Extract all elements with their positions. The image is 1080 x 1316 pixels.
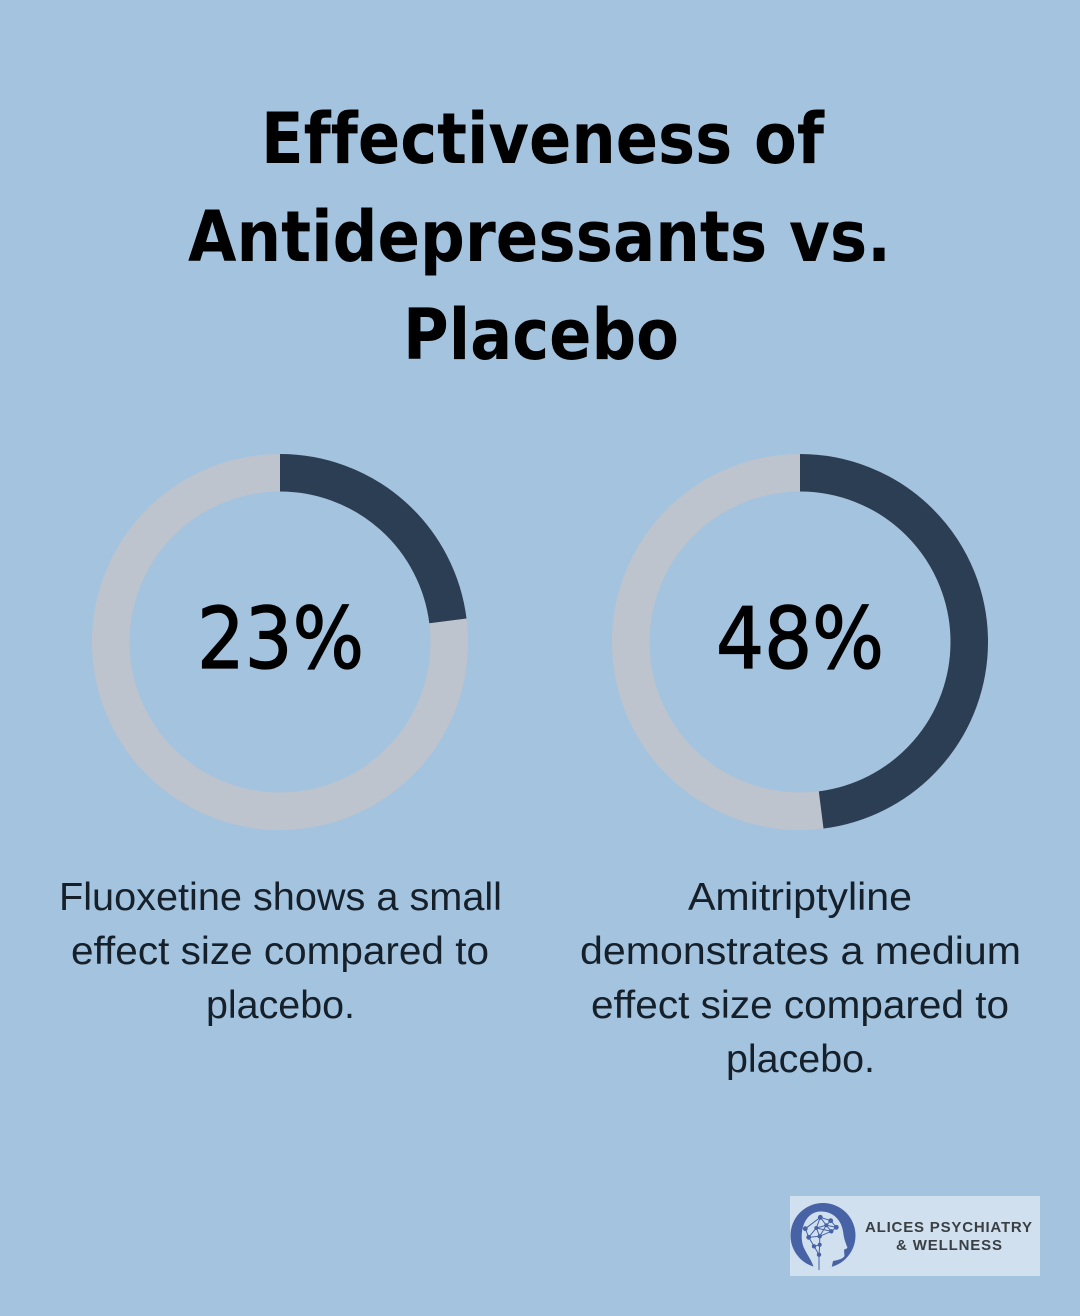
logo text: ALICES PSYCHIATRY [865,1219,1032,1236]
description: amitriptyline [580,876,1021,1081]
title: Placebo [403,294,679,376]
title: Antidepressants vs. [188,196,891,278]
logo text: & WELLNESS [896,1237,1002,1254]
panel: amitriptyline [580,473,1021,1081]
panel: fluoxetine [59,473,502,1027]
description: amitriptyline: effect size compared to [591,984,1009,1027]
description: fluoxetine: Fluoxetine shows a small [59,876,502,919]
description: amitriptyline: demonstrates a medium [580,930,1021,973]
description: fluoxetine [59,876,502,1027]
icon: head with brain network [790,1203,856,1270]
donut chart: 23% [111,473,449,811]
title: Effectiveness of [261,98,825,180]
stat: 23%: 23% [197,590,364,689]
logo text [865,1219,1032,1254]
description: fluoxetine: effect size compared to [71,930,489,973]
description: amitriptyline: Amitriptyline [688,876,912,919]
description: amitriptyline: placebo. [726,1038,875,1081]
title [188,98,891,376]
donut chart: 48% [631,473,969,811]
logo: Alices Psychiatry & Wellness [790,1196,1040,1276]
stat: 48%: 48% [716,590,884,689]
description: fluoxetine: placebo. [206,984,355,1027]
